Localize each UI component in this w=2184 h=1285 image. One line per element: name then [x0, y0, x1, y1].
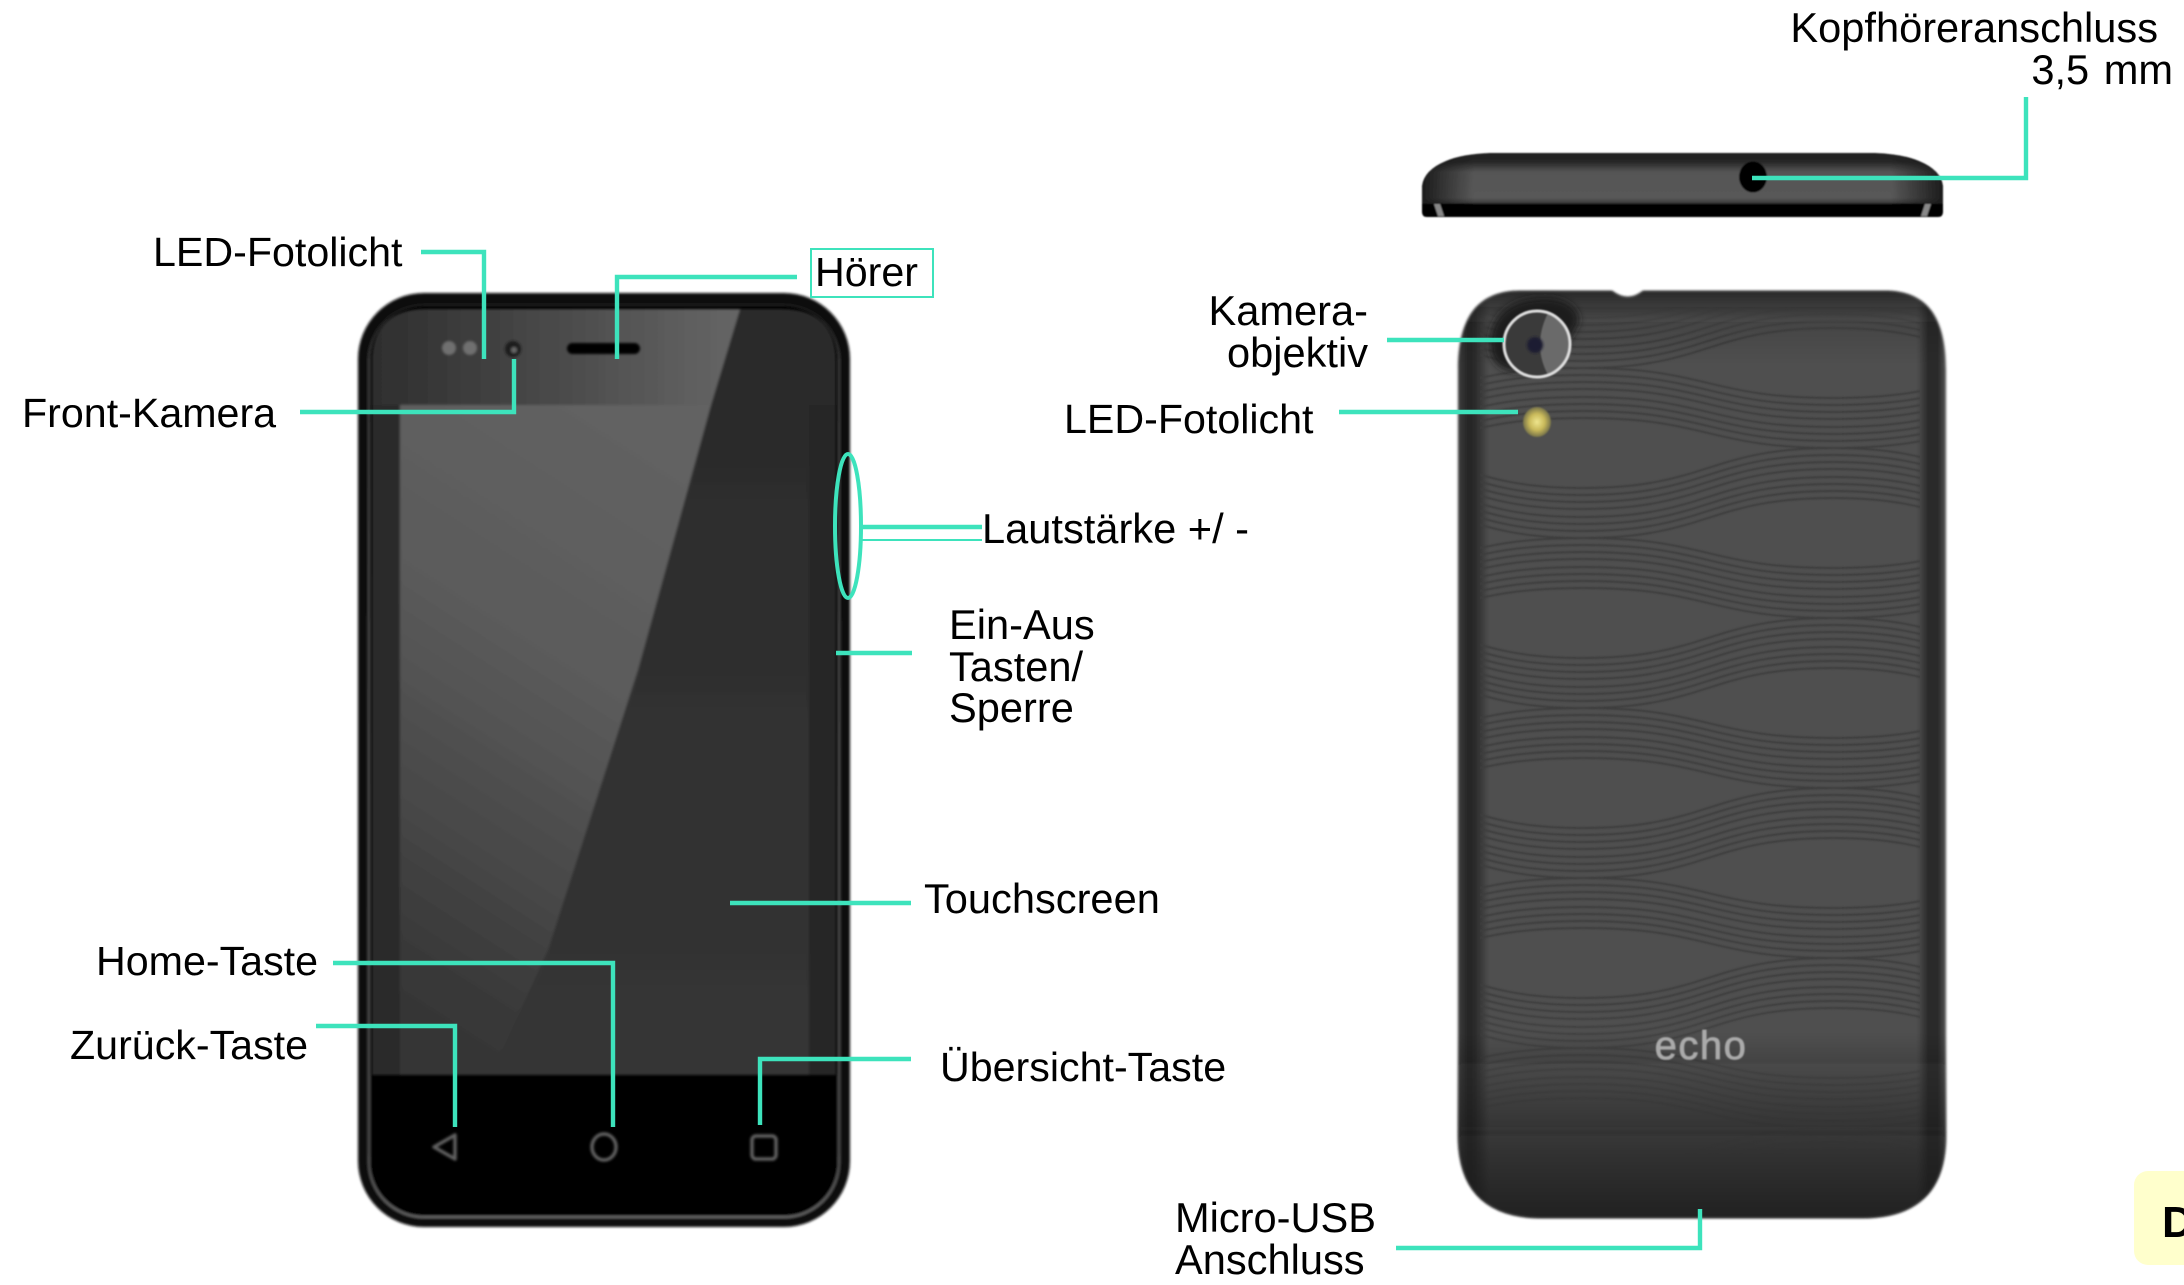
line: Hörer	[617, 277, 797, 359]
label: Hörer: Hörer	[815, 249, 918, 295]
left side strip	[372, 405, 400, 1075]
label: Kopfhöreranschluss: 3,5 mm	[2031, 46, 2173, 93]
label: Lautstärke: Lautstärke +/ -	[982, 505, 1249, 552]
label: Touchscreen: Touchscreen	[924, 875, 1160, 922]
icon: front camera	[505, 341, 521, 357]
label: Ein-Aus Tasten/Sperre: Sperre	[949, 684, 1074, 731]
phone body frame	[358, 293, 850, 1227]
label: Kopfhöreranschluss	[1790, 4, 2173, 93]
badge	[2134, 1171, 2184, 1265]
callout lines	[300, 97, 2026, 1248]
label: Home-Taste: Home-Taste	[96, 938, 318, 984]
line: Zurück	[316, 1026, 455, 1127]
label: Ein-Aus Tasten/Sperre	[949, 601, 1095, 731]
icon: home button	[592, 1134, 616, 1160]
back shading	[1458, 291, 1946, 1218]
label: Micro-USB Anschluss: Micro-USB	[1175, 1194, 1376, 1241]
label: Kameraobjektiv: Kamera-	[1208, 287, 1368, 334]
line: Ein-Aus	[836, 651, 912, 655]
top view end shading	[1422, 153, 1943, 204]
earpiece speaker	[567, 343, 640, 354]
back body	[1458, 291, 1946, 1218]
label: LED-Fotolicht back: LED-Fotolicht	[1064, 396, 1314, 442]
line: Lautstärke thin	[861, 539, 982, 541]
wave texture	[1486, 324, 1920, 1067]
glass glare: top bezel	[372, 309, 740, 405]
label: Micro-USB Anschluss: Anschluss	[1175, 1236, 1365, 1283]
phone: front view	[358, 293, 850, 1227]
line: Kameraobjektiv	[1387, 338, 1504, 342]
side notches	[1434, 204, 1444, 216]
label: Kameraobjektiv	[1208, 287, 1368, 376]
screen glass	[372, 309, 836, 1075]
line: Front-Kamera	[300, 359, 514, 412]
line: LED-Fotolicht front	[421, 252, 484, 359]
line: Übersicht	[760, 1059, 911, 1125]
phone: top edge view	[1422, 153, 1943, 217]
label: Ein-Aus Tasten/Sperre: Ein-Aus	[949, 601, 1095, 648]
label: Micro-USB Anschluss	[1175, 1194, 1376, 1283]
Lautstärke ellipse	[835, 454, 861, 598]
right side strip	[809, 405, 836, 1075]
icon: headphone jack	[1739, 162, 1767, 192]
icon: overview button	[752, 1136, 776, 1159]
icon: rear camera	[1490, 298, 1578, 377]
line: Touchscreen	[730, 901, 911, 905]
line: Lautstärke	[861, 525, 982, 529]
label: Front-Kamera: Front-Kamera	[22, 390, 276, 436]
LED dots	[442, 341, 477, 355]
line: Micro-USB	[1396, 1209, 1700, 1248]
label: Übersicht-Taste: Übersicht-Taste	[940, 1044, 1226, 1090]
icon: LED flash	[1523, 407, 1551, 437]
line: Home	[333, 963, 613, 1127]
label: Kameraobjektiv: objektiv	[1227, 329, 1368, 376]
line: LED-Fotolicht back	[1339, 410, 1518, 414]
label: Ein-Aus Tasten/Sperre: Tasten/	[949, 643, 1084, 690]
label: Zurück-Taste: Zurück-Taste	[70, 1022, 308, 1068]
Hörer label box	[811, 249, 933, 297]
label: Kopfhöreranschluss: Kopfhöreranschluss	[1790, 4, 2158, 51]
label: LED-Fotolicht front: LED-Fotolicht	[153, 229, 403, 275]
line: Kopfhöreranschluss	[1752, 97, 2026, 178]
phone: back view	[1456, 288, 1948, 1220]
logo: echo: echo	[1655, 1024, 1747, 1068]
icon: back button	[434, 1135, 455, 1159]
display glare	[400, 405, 711, 1075]
